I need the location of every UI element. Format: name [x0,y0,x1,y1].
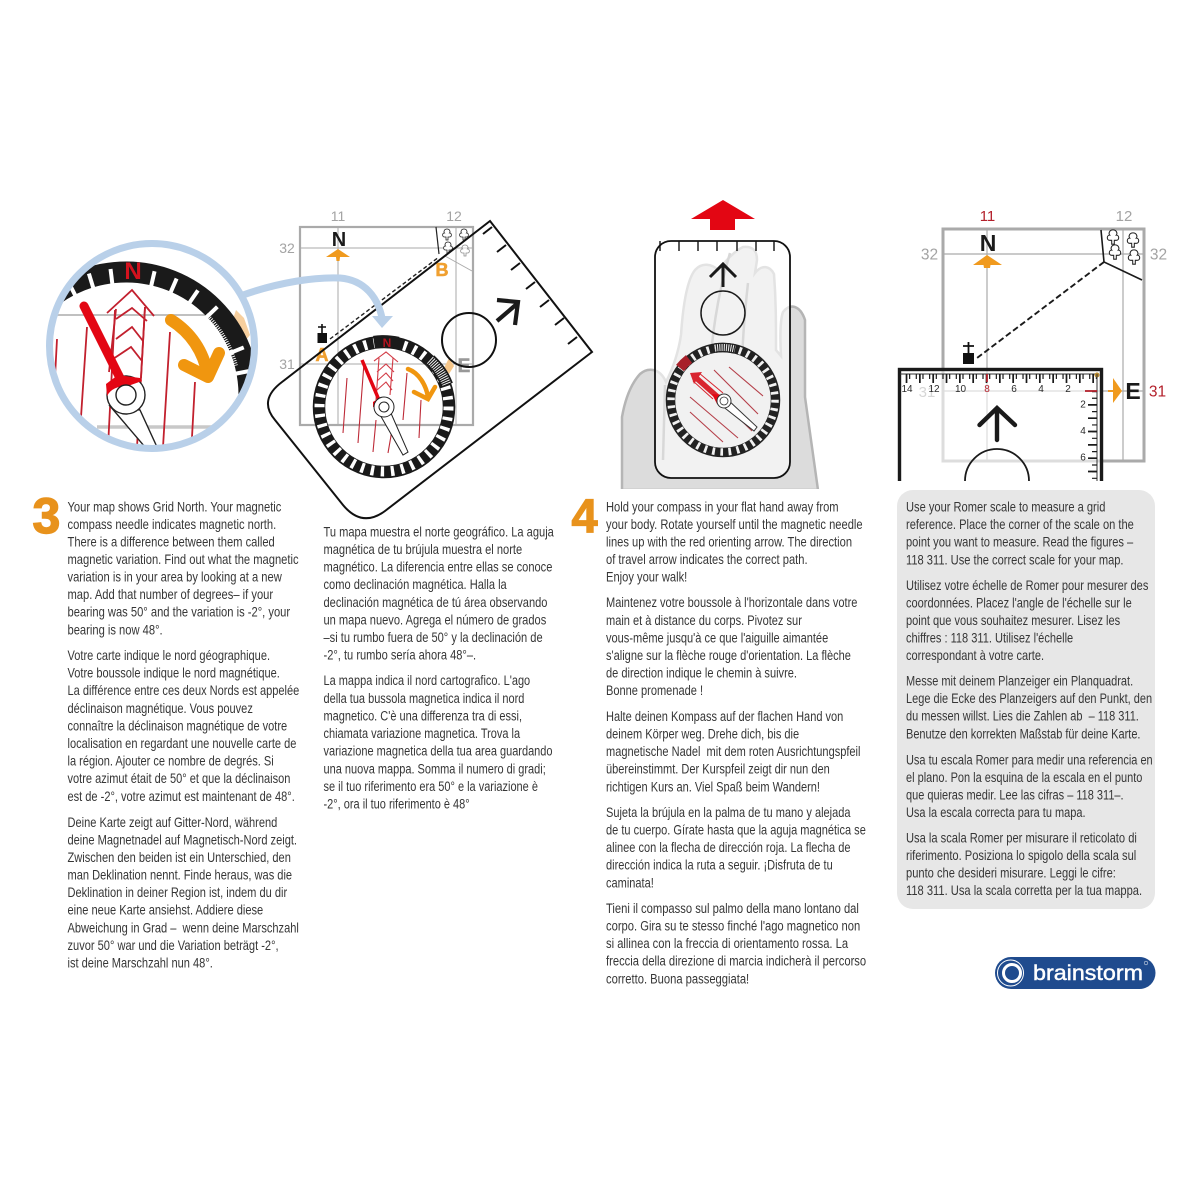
church landmark A: A [316,345,328,365]
Italian paragraph: riferimento. Posiziona lo spigolo della scala sul [906,848,1136,863]
Italian paragraph: Usa la scala Romer per misurare il reticolato di [906,831,1137,846]
travel arrow [980,408,1015,440]
English paragraph: reference. Place the corner of the scale on the [906,517,1134,532]
horizontal ruler: 10 [955,384,966,395]
Italian paragraph: variazione magnetica della tua area guardando [324,743,553,759]
English paragraph: Use your Romer scale to measure a grid [906,500,1106,515]
magnified compass [54,262,251,445]
English paragraph: There is a difference between them called [68,535,275,550]
compass bezel [319,336,449,472]
Italian paragraph: si allinea con la freccia di orientamento rossa. La [606,936,848,951]
Italian paragraph: una nuova mappa. Somma il numero di gradi; [324,761,546,777]
French paragraph: est de -2°, votre azimut est maintenant de 48°. [68,789,295,804]
travel direction red arrow [691,200,755,230]
grid labels: 11 [980,208,995,225]
illustration: map with rotated compass [268,208,592,518]
Italian paragraph: La mappa indica il nord cartografico. L'ago [324,673,530,688]
direction of travel arrow [497,300,518,325]
vertical ruler: 2 [1080,400,1086,410]
German paragraph: deinem Körper weg. Drehe dich, bis die [606,726,799,742]
magnified bezel [63,262,251,394]
travel arrow [710,264,736,287]
French paragraph: main et à distance du corps. Pivotez sur [606,613,802,628]
German paragraph: magnetische Nadel mit dem roten Ausrichtungspfeil [606,744,860,759]
Spanish paragraph: que quieras medir. Lee las cifras – 118 311–. [906,787,1124,803]
landmark B: B [436,260,448,280]
Spanish paragraph: Tu mapa muestra el norte geográfico. La aguja [324,525,554,540]
German paragraph: Abweichung in Grad – wenn deine Marschzahl [68,921,299,936]
grid labels [921,208,1167,400]
horizontal ruler [900,372,1100,392]
compass bezel: N [383,336,391,350]
French paragraph: Votre boussole indique le nord magnétique. [68,666,280,681]
horizontal ruler: 14 [901,384,913,395]
Italian paragraph: -2°, ora il tuo riferimento è 48° [324,796,470,812]
Spanish paragraph: magnético. La diferencia entre ellas se conoce [324,560,553,575]
English paragraph: Hold your compass in your flat hand away from [606,500,839,515]
English paragraph: variation is in your area by looking at a new [68,570,282,585]
vertical ruler [1080,374,1097,481]
map grid [300,227,473,425]
German paragraph: deine Magnetnadel auf Magnetisch-Nord zeigt. [68,833,297,848]
grid labels: 32 [1150,246,1167,264]
Spanish paragraph: el plano. Pon la esquina de la escala en el punto [906,770,1143,785]
French paragraph: point que vous souhaitez mesurer. Lisez les [906,613,1120,628]
French paragraph: Votre carte indique le nord géographique. [68,648,270,663]
German paragraph: Benutze den korrekten Maßstab für deine Karte. [906,726,1140,742]
Spanish paragraph: alinee con la flecha de dirección roja. La flecha de [606,840,851,855]
forest symbols [436,227,469,256]
French paragraph: coordonnées. Placez l'angle de l'échelle sur le [906,596,1132,611]
illustration: Romer scale on map [898,211,1166,481]
German paragraph: Halte deinen Kompass auf der flachen Hand von [606,709,843,724]
orienting arrow and needle [690,372,757,431]
dashed bearing line [330,257,439,339]
grid labels: 12 [1116,208,1132,225]
Spanish paragraph: Sujeta la brújula en la palma de tu mano y alejada [606,805,851,820]
magnified compass: N [124,258,142,285]
map grid labels: 32 [279,240,295,256]
hand [622,247,818,490]
map grid labels [279,208,462,372]
east marker: E [1125,378,1141,404]
east marker [444,356,470,377]
magnified needle [84,306,120,378]
horizontal ruler: 2 [1065,384,1071,395]
Italian paragraph: se il tuo riferimento era 50° e la variazione è [324,779,538,794]
text column 2 [324,525,557,812]
magnified rotation arrow [171,320,219,377]
horizontal ruler: 12 [928,384,940,395]
magnified orienting lines [55,307,195,447]
baseplate circle [964,448,1030,481]
French paragraph: correspondant à votre carte. [906,648,1044,663]
Spanish paragraph: caminata! [606,875,654,891]
English paragraph: lines up with the red orienting arrow. The direction [606,535,852,550]
English paragraph: Your map shows Grid North. Your magnetic [68,500,281,515]
French paragraph: votre azimut était de 50° et que la déclinaison [68,771,291,786]
grey text panel [897,490,1156,909]
Romer scale [898,368,1104,481]
German paragraph: du messen willst. Lies die Zahlen ab – 118 311. [906,708,1139,724]
church landmark [963,342,974,364]
German paragraph: eine neue Karte ansiehst. Addiere diese [68,903,263,918]
French paragraph: Utilisez votre échelle de Romer pour mesurer des [906,578,1148,593]
north marker [973,230,1002,268]
German paragraph: Deine Karte zeigt auf Gitter-Nord, während [68,815,277,830]
Italian paragraph: punto che desideri misurare. Leggi le cifre: [906,866,1116,881]
Spanish paragraph: –si tu rumbo fuera de 50° y la declinación de [324,630,543,645]
English paragraph: compass needle indicates magnetic north. [68,517,276,532]
magnifier detail circle [46,240,393,452]
north marker: N [980,230,996,256]
Romer scale: 31 [919,384,935,401]
horizontal ruler: 6 [1011,384,1017,395]
French paragraph: s'aligne sur la flèche rouge d'orientation. La flèche [606,648,851,663]
English paragraph: point you want to measure. Read the figures – [906,535,1133,550]
brainstorm logo: brainstorm [1033,962,1143,985]
Italian paragraph: freccia della direzione di marcia indicherà il percorso [606,954,866,969]
illustration: compass held in flat hand [622,200,818,490]
compass orienting arrow [374,352,398,400]
grid labels: 31 [1149,384,1166,400]
Italian paragraph: corpo. Gira su te stesso finché l'ago magnetico non [606,919,860,934]
Spanish paragraph: dirección indica la ruta a seguir. ¡Disfruta de tu [606,857,833,873]
map grid labels: 11 [331,208,345,224]
Italian paragraph: della tua bussola magnetica indica il nord [324,691,525,706]
German paragraph: ist deine Marschzahl nun 48°. [68,956,213,971]
English paragraph: map. Add that number of degrees– if your [68,587,273,602]
map grid labels: 31 [279,356,295,372]
Spanish paragraph: de tu cuerpo. Gírate hasta que la aguja magnética se [606,822,866,838]
French paragraph: déclinaison magnétique. Vous pouvez [68,701,253,716]
east marker [1108,378,1141,404]
Italian paragraph: chiamata variazione magnetica. Trova la [324,726,520,741]
French paragraph: la région. Ajouter ce nombre de degrés. Si [68,754,274,769]
text column 1 [68,500,302,971]
English paragraph: bearing was 50° and the variation is -2°, your [68,605,290,620]
compass bezel [670,347,776,452]
forest [1101,230,1142,280]
French paragraph: vous-même jusqu'à ce que l'aiguille aimantée [606,631,828,646]
Spanish paragraph: como declinación magnética. Halla la [324,577,507,592]
Spanish paragraph: Usa tu escala Romer para medir una referencia en [906,752,1153,768]
English paragraph: your body. Rotate yourself until the magnetic needle [606,517,863,532]
German paragraph: Deklination in deiner Region ist, indem du dir [68,885,287,900]
map grid labels: 12 [446,208,462,224]
red orienting lines [690,367,763,442]
compass orienting lines [343,363,421,453]
French paragraph: Maintenez votre boussole à l'horizontale dans votre [606,595,858,610]
rotated baseplate [268,221,592,518]
German paragraph: übereinstimmt. Der Kurspfeil zeigt dir nun den [606,761,830,777]
magnetic needle [362,360,408,455]
north marker [326,229,350,261]
Spanish paragraph: magnética de tu brújula muestra el norte [324,542,522,557]
French paragraph: localisation en regardant une nouvelle carte de [68,736,297,751]
English paragraph: 118 311. Use the correct scale for your map. [906,553,1124,568]
Spanish paragraph: -2°, tu rumbo sería ahora 48°–. [324,648,476,663]
French paragraph: chiffres : 118 311. Utilisez l'échelle [906,631,1073,646]
Italian paragraph: magnetico. C'è una differenza tra di essi, [324,708,522,724]
step number 4: 4 [572,489,598,542]
baseplate circle [701,291,745,335]
English paragraph: bearing is now 48°. [68,623,163,638]
connector arrow to compass [243,278,393,328]
Spanish paragraph: Usa la escala correcta para tu mapa. [906,805,1086,820]
German paragraph: Lege die Ecke des Planzeigers auf den Punkt, den [906,691,1152,706]
Italian paragraph: Tieni il compasso sul palmo della mano lontano dal [606,901,859,916]
French paragraph: Bonne promenade ! [606,683,703,698]
vertical ruler: 4 [1080,426,1086,437]
vertical ruler: 6 [1080,452,1086,464]
east marker: E [458,356,470,377]
German paragraph: Zwischen den beiden ist ein Unterschied, den [68,850,291,865]
Spanish paragraph: declinación magnética de tú área observando [324,595,548,610]
German paragraph: richtigen Kurs an. Viel Spaß beim Wandern! [606,779,820,795]
grid labels: 32 [921,246,938,264]
German paragraph: zuvor 50° war und die Variation beträgt -2°, [68,938,279,953]
brainstorm logo [995,957,1156,989]
English paragraph: magnetic variation. Find out what the magnetic [68,552,299,567]
text column 3 [606,500,869,987]
finger outlines seen through plate [663,253,748,460]
map grid [943,229,1144,461]
German paragraph: man Deklination nennt. Finde heraus, was die [68,868,292,883]
Italian paragraph: corretto. Buona passeggiata! [606,972,749,987]
step number 3: 3 [32,488,60,544]
north marker: N [332,229,346,251]
magnified orienting arrow [107,290,154,378]
French paragraph: de direction indique le chemin à suivre. [606,666,797,681]
Italian paragraph: 118 311. Usa la scala corretta per la tua mappa. [906,883,1142,898]
English paragraph: of travel arrow indicates the correct path. [606,552,808,567]
orange rotation arrow [408,369,435,399]
dashed bearing line [977,262,1104,358]
French paragraph: connaître la déclinaison magnétique de votre [68,719,287,734]
Spanish paragraph: un mapa nuevo. Agrega el número de grados [324,613,546,628]
church landmark A [316,324,328,365]
German paragraph: Messe mit deinem Planzeiger ein Planquadrat. [906,673,1133,689]
English paragraph: Enjoy your walk! [606,570,687,585]
French paragraph: La différence entre ces deux Nords est appelée [68,683,299,698]
horizontal ruler: 4 [1038,384,1044,395]
baseplate [655,241,790,478]
horizontal ruler: 8 [984,384,990,395]
